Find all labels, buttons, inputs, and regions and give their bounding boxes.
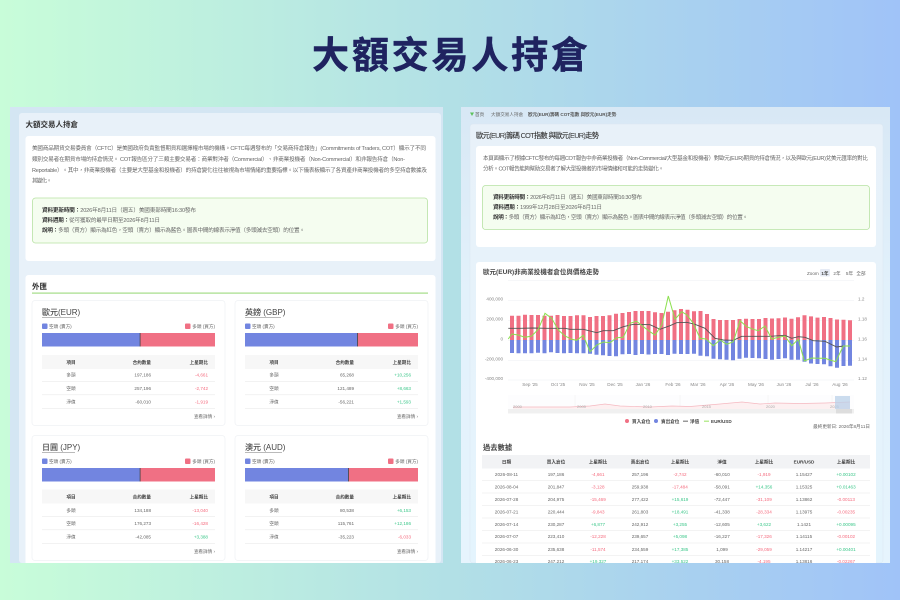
table: historical data: 1.15325	[796, 484, 813, 490]
card: EUR	[32, 300, 225, 426]
link: 查看詳情 ›	[397, 548, 418, 555]
table: JPY positions: 空頭	[66, 520, 76, 527]
table: historical data: 234,559	[632, 547, 649, 552]
table: historical data: EUR/USD	[794, 460, 815, 464]
table: historical data: 247,212	[548, 559, 565, 564]
card: AUD: 澳元 (AUD)	[245, 442, 286, 452]
bar: long short ratio	[42, 468, 215, 482]
table: GBP positions: 淨值	[269, 398, 279, 406]
table: historical data: 239,657	[632, 534, 649, 539]
table: historical data: 1,099	[716, 547, 728, 552]
table: historical data: -16,227	[714, 534, 730, 539]
table: AUD positions: 合約數量	[336, 494, 354, 500]
table: GBP positions: 項目	[269, 360, 279, 366]
table: historical data: 1.14217	[796, 547, 813, 552]
panel: EUR detail screenshot	[461, 107, 890, 572]
table: historical data: 220,444	[548, 510, 565, 514]
long position bars	[512, 309, 850, 340]
table: historical data: 2026-07-21	[495, 510, 519, 514]
navigator: 2025	[830, 404, 840, 409]
table: historical data: 日期	[502, 458, 511, 466]
panel: introduction	[26, 136, 436, 261]
table: JPY positions: 多頭	[66, 507, 76, 514]
table: historical data: +0.00095	[836, 522, 856, 527]
right axis labels: 1.2	[858, 296, 865, 302]
table: historical data: -9,843	[591, 510, 605, 514]
table: historical data: +18,491	[672, 510, 689, 514]
navigator: 2015	[702, 404, 712, 409]
table: historical data: 1.1421	[797, 522, 811, 527]
table: EUR positions: 項目	[66, 360, 76, 366]
left axis labels: -400,000	[485, 376, 503, 381]
table: historical data: 1.13862	[796, 497, 813, 502]
card: EUR: 空頭 (賣方)	[49, 323, 72, 330]
table: GBP positions	[245, 355, 418, 409]
card: AUD: 空頭 (賣方)	[252, 458, 275, 465]
table: historical data: 197,186	[548, 472, 565, 477]
text block: introduction paragraph	[32, 144, 427, 184]
table: historical data: +6,877	[591, 522, 606, 527]
table: historical data: 買入倉位	[547, 458, 566, 466]
table: historical data: 2026-08-04	[495, 484, 519, 490]
card: GBP	[235, 300, 428, 426]
navigator: 2020	[766, 404, 776, 409]
table: historical data: +17,385	[672, 547, 689, 552]
table: AUD positions: 項目	[269, 494, 279, 500]
table: JPY positions: +3,388	[194, 534, 208, 540]
table: EUR positions: 空頭	[66, 385, 76, 392]
table: historical data: 1.15427	[796, 472, 813, 477]
table: JPY positions: 134,188	[134, 508, 151, 513]
breadcrumb: 首頁	[475, 111, 485, 118]
table: JPY positions: -42,085	[135, 534, 151, 540]
x axis labels: Nov '25	[579, 382, 595, 387]
table: GBP positions: -56,221	[338, 400, 354, 404]
panel: chart and table	[476, 262, 876, 572]
card: JPY: 空頭 (賣方)	[49, 458, 72, 465]
heading: historical data: 過去數據	[483, 443, 513, 452]
heading: EUR detail title: 歐元(EUR)籌碼 COT指數 與歐元(EUR)走勢	[476, 131, 600, 140]
table: JPY positions: 淨值	[66, 534, 76, 540]
legend: 買入倉位	[632, 418, 651, 425]
text block: EUR paragraph: 本頁面顯示了根據CFTC發布的每週COT報告中非商業投機者（Non-Commercial/大型基金和投機者）對歐元(EUR)期貨的持倉情況，以及與歐元(EUR)兌美元匯率的對比	[483, 154, 868, 162]
table: AUD positions: 80,538	[340, 508, 354, 513]
link: 查看詳情 ›	[194, 413, 215, 420]
table: historical data: 上星期比	[671, 458, 690, 466]
heading: page title: 大額交易人持倉	[26, 119, 78, 129]
table: AUD positions: -6,033	[398, 534, 411, 540]
text block: EUR paragraph: 分析。COT報告能夠幫助交易者了解大型投機者的市場情緒和可能的走勢變化。	[483, 164, 664, 172]
table: EUR positions: 合約數量	[133, 359, 151, 366]
table: EUR positions: -2,742	[195, 386, 208, 391]
table: GBP positions: +10,256	[394, 372, 411, 378]
table: GBP positions: 65,268	[340, 372, 354, 378]
table: historical data: -60,010	[714, 472, 730, 477]
table: historical data: -4,195	[757, 559, 771, 564]
table: historical data: -4,661	[591, 472, 605, 477]
table: historical data: -41,338	[714, 510, 730, 514]
table: EUR positions: -60,010	[135, 400, 151, 404]
table: historical data: 上星期比	[837, 458, 856, 466]
table: EUR positions: -4,661	[195, 372, 208, 378]
table: AUD positions: 空頭	[269, 520, 279, 527]
text block: introduction paragraph: 其變化。	[32, 176, 52, 184]
card: GBP: 英鎊 (GBP)	[245, 307, 286, 317]
table: GBP positions: +1,593	[397, 400, 411, 404]
table: GBP positions: 合約數量	[336, 359, 354, 366]
bar: long short ratio	[245, 333, 418, 346]
zoom buttons: 1年	[821, 270, 829, 277]
table: historical data: +19,327	[590, 559, 607, 564]
table: AUD positions: 上星期比	[393, 494, 411, 500]
table: EUR positions: 淨值	[66, 398, 76, 406]
table: historical data: -72,447	[714, 497, 730, 502]
x axis labels: Oct '25	[551, 382, 566, 387]
table: historical data: -12,228	[590, 534, 606, 539]
right axis labels	[858, 296, 867, 381]
link: 查看詳情 ›	[194, 548, 215, 555]
table: historical data: +15,619	[672, 497, 689, 502]
table: historical data: 30,158	[715, 559, 729, 564]
table: JPY positions: 176,273	[134, 521, 151, 526]
x axis labels: Apr '26	[720, 382, 735, 387]
left axis labels: 0	[500, 336, 503, 342]
zoom buttons: 全部	[856, 270, 866, 277]
panel: dashboard screenshot	[10, 107, 443, 570]
table: historical data: 217,174	[632, 559, 649, 564]
zoom buttons	[807, 269, 866, 277]
x axis labels: Jul '26	[805, 382, 819, 387]
table: historical data: -28,334	[756, 510, 772, 514]
table: GBP positions: 121,489	[337, 386, 354, 391]
x axis labels	[522, 382, 848, 387]
table: AUD positions: 115,761	[338, 521, 354, 526]
table: historical data: +3,255	[673, 522, 688, 527]
table: GBP positions: 多頭	[269, 372, 279, 378]
table: historical data: 2026-06-23	[495, 559, 519, 564]
net position line	[508, 322, 850, 347]
panel: EUR introduction	[476, 146, 876, 247]
table: historical data: -2,742	[673, 472, 687, 477]
table: historical data: 2026-07-14	[495, 522, 519, 527]
table: JPY positions: 合約數量	[133, 494, 151, 500]
card: GBP: 空頭 (賣方)	[252, 323, 275, 330]
table: JPY positions: -16,428	[192, 521, 208, 526]
navigator: 2000	[513, 404, 523, 409]
callout: data notes: 資料週期：從可獲取的最早日期至2026年8月11日	[42, 216, 160, 224]
table: historical data: -12,605	[714, 522, 730, 527]
card: EUR: 歐元(EUR)	[42, 307, 81, 317]
last updated note: 最終更新日: 2026年8月11日	[813, 423, 870, 430]
callout: EUR data notes	[482, 186, 870, 230]
EUR/USD price line	[508, 296, 850, 362]
table: historical data: -31,109	[756, 497, 772, 502]
table: historical data: -3,128	[591, 484, 605, 490]
table: historical data: 2026-08-11	[495, 472, 519, 477]
table: historical data: 201,847	[548, 484, 565, 490]
table: historical data: -0.00235	[837, 510, 856, 514]
table: historical data: 204,975	[548, 497, 565, 502]
table: AUD positions: -35,223	[338, 534, 354, 540]
left axis labels: -200,000	[485, 356, 503, 362]
navigator: 2010	[643, 404, 653, 409]
table: historical data: +3,622	[757, 522, 772, 527]
callout: EUR data notes: 資料更新時間：2026年8月11日（週五）美國東部時間16:30發布	[493, 193, 642, 201]
bar: long short ratio	[245, 468, 418, 482]
table: historical data: 277,422	[632, 497, 649, 502]
right axis labels: 1.14	[858, 356, 867, 362]
table: GBP positions: 空頭	[269, 385, 279, 392]
table: historical data: +14,356	[756, 484, 773, 490]
table: historical data: -29,059	[756, 547, 772, 552]
x axis labels: May '26	[748, 382, 764, 387]
table: JPY positions: 上星期比	[190, 494, 208, 500]
table: historical data: +0.01463	[836, 484, 856, 490]
bar: long short ratio	[42, 333, 215, 346]
table: JPY positions: 項目	[66, 494, 76, 500]
x axis labels: Jun '26	[777, 382, 792, 387]
heading: chart title: 歐元(EUR)非商業投機者倉位與價格走勢	[483, 267, 600, 276]
left axis labels: 400,000	[486, 296, 503, 302]
table: AUD positions: 多頭	[269, 507, 279, 514]
text block: introduction paragraph: 類別交易者在期貨市場的持倉情況。 COT報告區分了三類主要交易者：商業對沖者（Commercial）、非商業投機者（Non-Commercial）和非報告持倉（Non-	[32, 155, 405, 163]
x axis labels: Jan '26	[636, 382, 651, 387]
table: historical data: -11,574	[590, 547, 606, 552]
table: historical data: 242,912	[632, 522, 649, 527]
text block: EUR paragraph	[483, 154, 868, 172]
table: historical data: 230,287	[548, 522, 565, 527]
table: historical data: 1.14115	[796, 534, 813, 539]
table: historical data: -0.00102	[837, 534, 856, 539]
right axis labels: 1.18	[858, 316, 867, 322]
legend: 淨值	[690, 418, 700, 425]
table: historical data: 257,196	[632, 472, 649, 477]
breadcrumb: 歐元(EUR)籌碼 COT指數 與歐元(EUR)走勢	[528, 111, 617, 118]
table: JPY positions	[42, 490, 215, 544]
zoom buttons: 2年	[833, 270, 841, 277]
legend: 賣出倉位	[661, 418, 680, 425]
link: 查看詳情 ›	[397, 413, 418, 420]
zoom buttons: Zoom	[807, 271, 819, 276]
table: historical data: -0.00113	[837, 497, 855, 502]
table: AUD positions: +12,186	[394, 521, 411, 526]
x axis labels: Sep '25	[522, 382, 538, 387]
table: EUR positions: 197,186	[134, 372, 151, 378]
x axis labels: Feb '26	[665, 382, 681, 387]
table: historical data: 2026-06-30	[495, 547, 519, 552]
table: historical data: +0.00401	[836, 547, 856, 552]
table: historical data: -17,484	[672, 484, 688, 490]
x axis labels: Mar '26	[690, 382, 706, 387]
x axis labels: Dec '25	[607, 382, 623, 387]
table: historical data: 1.13816	[796, 559, 813, 564]
table: EUR positions: -1,919	[195, 400, 208, 404]
table: historical data: 上星期比	[589, 458, 608, 466]
panel: foreign exchange	[26, 275, 436, 570]
table: historical data: -15,469	[590, 497, 606, 502]
table: historical data: 2026-07-28	[495, 497, 519, 502]
breadcrumb	[470, 112, 616, 117]
table: historical data: 上星期比	[755, 458, 774, 466]
chart: positions and price	[485, 280, 870, 430]
table: historical data: 223,410	[548, 534, 565, 539]
short position bars	[512, 340, 850, 368]
callout: EUR data notes: 說明：多頭（買方）顯示為紅色，空頭（賣方）顯示為藍色。圖表中間的線表示淨值（多頭減去空頭）的位置。	[493, 213, 748, 221]
table: EUR positions: 257,196	[134, 386, 151, 391]
zoom buttons: 5年	[846, 270, 853, 277]
navigator	[508, 395, 854, 414]
table: historical data: -58,091	[714, 484, 730, 490]
legend: EUR/USD	[711, 419, 732, 424]
text block: introduction paragraph: Reportable）。其中，非商業投機者（主要是大型基金和投機者）的持倉變化往往被視為市場情緒的重要指標。以下儀表板顯示了各資產非商業投機者的多空持倉數據及	[32, 166, 427, 174]
table: historical data: 1.13975	[796, 510, 813, 514]
x axis labels: Aug '26	[832, 382, 848, 387]
table: AUD positions	[245, 490, 418, 544]
table: historical data: +5,098	[673, 534, 688, 539]
right axis labels: 1.12	[858, 376, 867, 381]
table: EUR positions: 上星期比	[190, 359, 208, 366]
table: historical data: 2026-07-07	[495, 534, 519, 539]
table: GBP positions: +8,663	[397, 386, 411, 391]
table: historical data: 261,803	[632, 510, 649, 514]
table: EUR positions: 多頭	[66, 372, 76, 378]
callout: EUR data notes: 資料週期：1999年12月28日至2026年8月11日	[493, 203, 602, 211]
callout: data notes	[32, 198, 428, 243]
card: AUD: 多頭 (買方)	[395, 458, 418, 465]
table: historical data: 賣出倉位	[631, 458, 650, 466]
table: historical data: +33,522	[672, 559, 689, 564]
card: JPY: 多頭 (買方)	[192, 458, 215, 465]
card: EUR: 多頭 (買方)	[192, 323, 215, 330]
card: AUD	[235, 436, 428, 560]
callout: data notes: 說明：多頭（買方）顯示為紅色，空頭（賣方）顯示為藍色。圖表中間的線表示淨值（多頭減去空頭）的位置。	[42, 226, 305, 234]
breadcrumb: 大額交易人持倉	[491, 111, 524, 118]
table: historical data: -1,919	[757, 472, 771, 477]
title: 大額交易人持倉	[312, 35, 588, 76]
table: historical data: 235,638	[548, 547, 565, 552]
table: historical data: +0.00102	[836, 472, 856, 477]
table: historical data: 淨值	[717, 458, 727, 466]
table: historical data: -0.02267	[837, 559, 856, 564]
navigator: 2005	[577, 404, 587, 409]
table: historical data	[482, 455, 870, 564]
card: JPY	[32, 436, 225, 560]
text block: introduction paragraph: 美國商品期貨交易委員會（CFTC）是美國政府負責監督期貨和選擇權市場的機構。CFTC每週發布的「交易商持倉報告」(Commitments of Traders, COT）顯示了不同	[32, 144, 426, 152]
table: JPY positions: -13,040	[192, 508, 208, 513]
table: AUD positions: +6,153	[397, 508, 411, 513]
table: EUR positions	[42, 355, 215, 409]
callout: data notes: 資料更新時間：2026年8月11日（週五）美國東部時間16:30發布	[42, 206, 196, 214]
right axis labels: 1.16	[858, 336, 867, 342]
heading: foreign exchange: 外匯	[32, 281, 47, 291]
left axis labels: 200,000	[486, 316, 503, 322]
table: historical data: 259,938	[632, 484, 649, 490]
card: JPY: 日圓 (JPY)	[42, 443, 81, 452]
table: AUD positions: 淨值	[269, 534, 279, 540]
table: GBP positions: 上星期比	[393, 359, 411, 366]
card: GBP: 多頭 (買方)	[395, 323, 418, 330]
table: historical data: -17,326	[756, 534, 772, 539]
legend	[625, 418, 732, 425]
left axis labels	[485, 296, 503, 381]
